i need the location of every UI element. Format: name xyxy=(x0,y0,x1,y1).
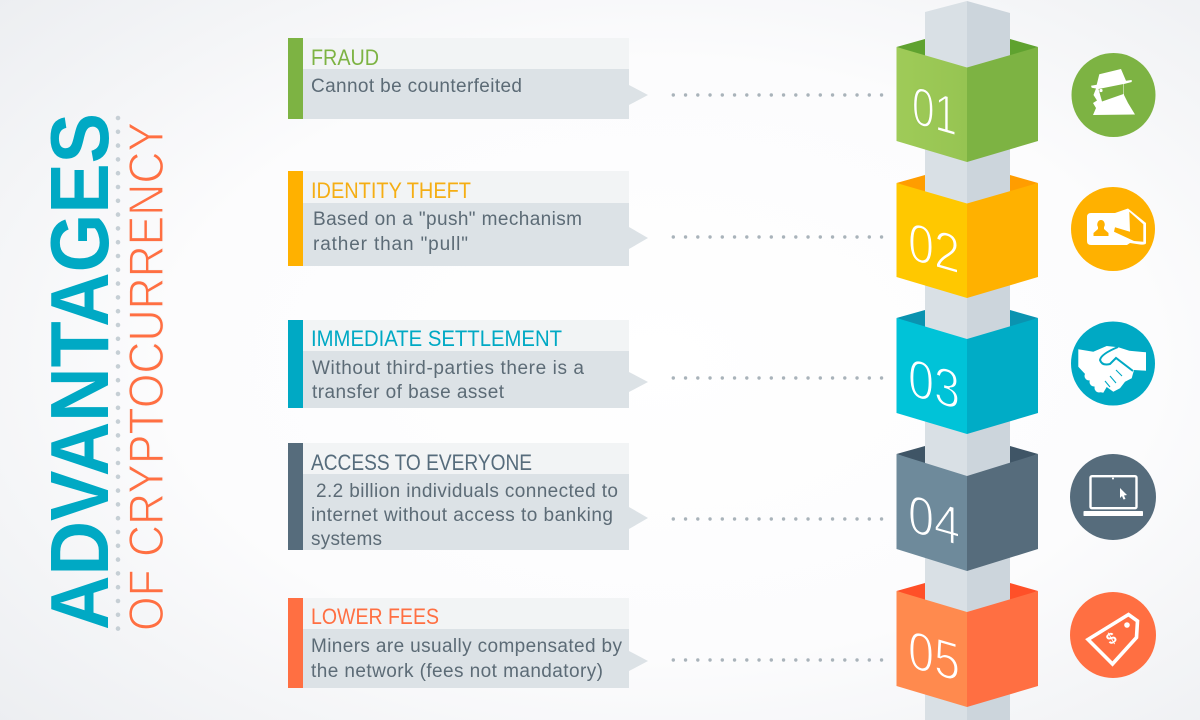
cube 05 xyxy=(896,583,1038,707)
text: settlement description: transfer of base asset xyxy=(312,382,505,403)
heading: lower fees: LOWER FEES xyxy=(311,604,439,629)
icon: handshake xyxy=(1071,322,1155,406)
text: identity theft description: rather than "pull" xyxy=(313,234,468,255)
icon: price tag: $ xyxy=(1104,629,1120,649)
text: identity theft description xyxy=(313,209,582,255)
text: lower fees description xyxy=(311,636,622,682)
icon: spy xyxy=(1072,53,1156,137)
text: settlement description: Without third-parties there is a xyxy=(312,358,584,379)
panel: identity theft xyxy=(288,171,648,266)
text: access description: systems xyxy=(311,529,382,550)
dotted connector 5 xyxy=(673,658,884,662)
heading: identity theft: IDENTITY THEFT xyxy=(311,178,471,203)
cube 02 xyxy=(896,175,1038,298)
cube 04 xyxy=(896,446,1038,571)
heading: fraud: FRAUD xyxy=(311,45,379,70)
text: access description: 2.2 billion individuals connected to xyxy=(316,481,618,502)
text: fraud description: Cannot be counterfeited xyxy=(311,76,522,97)
icon: laptop xyxy=(1070,454,1156,540)
text: access description: internet without access to banking xyxy=(311,505,613,526)
central column xyxy=(925,1,1010,720)
heading: advantages: ADVANTAGES xyxy=(33,113,126,630)
dotted connector 4 xyxy=(673,517,884,521)
panel: immediate settlement xyxy=(288,320,648,408)
icon: price tag xyxy=(1070,592,1156,678)
panel: fraud xyxy=(288,38,648,119)
text: lower fees description: the network (fees not mandatory) xyxy=(311,661,603,682)
number 03: 03 xyxy=(908,346,960,422)
title: advantages of cryptocurrency xyxy=(33,113,174,632)
number 04: 04 xyxy=(908,482,960,558)
dotted connector 2 xyxy=(673,235,884,239)
number 02: 02 xyxy=(908,210,960,286)
panel: lower fees xyxy=(288,598,648,688)
text: lower fees description: Miners are usually compensated by xyxy=(311,636,622,657)
icon: identity card xyxy=(1071,187,1155,271)
number 05: 05 xyxy=(908,618,960,694)
text: identity theft description: Based on a "push" mechanism xyxy=(313,209,582,230)
text: access description xyxy=(311,481,618,550)
number 01: 01 xyxy=(912,74,957,148)
title dotted divider xyxy=(116,118,120,632)
heading: access to everyone: ACCESS TO EVERYONE xyxy=(311,450,532,475)
cube 03 xyxy=(896,310,1038,434)
subheading: of cryptocurrency: OF CRYPTOCURRENCY xyxy=(120,122,174,631)
cube 01 xyxy=(896,39,1038,162)
heading: immediate settlement: IMMEDIATE SETTLEMENT xyxy=(311,326,562,351)
dotted connector 1 xyxy=(673,93,884,97)
dotted connector 3 xyxy=(673,376,884,380)
text: settlement description xyxy=(312,358,584,403)
panel: access to everyone xyxy=(288,443,648,550)
